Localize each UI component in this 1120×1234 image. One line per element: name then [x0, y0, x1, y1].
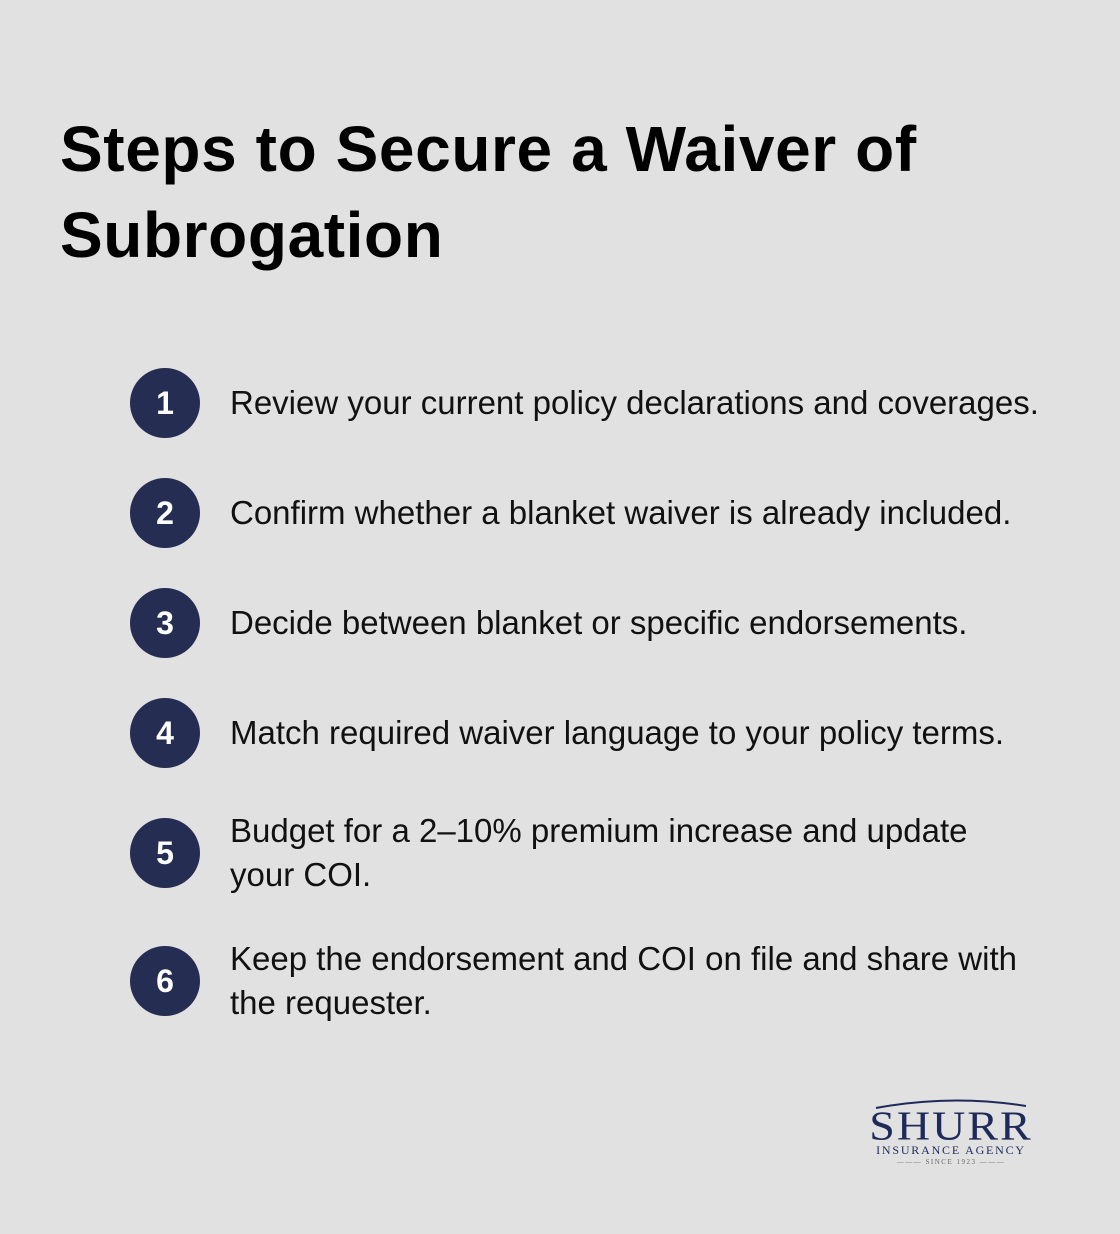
step 6: [130, 940, 1017, 1021]
logo: SHURR: [869, 1103, 1033, 1148]
step 1: 1: [156, 385, 174, 421]
step 1: Review your current policy declarations and coverages.: [230, 384, 1039, 421]
step 1: [130, 368, 1039, 438]
title: Steps to Secure a Waiver of: [60, 113, 917, 185]
step 6: 6: [156, 963, 174, 999]
step 2: Confirm whether a blanket waiver is already included.: [230, 494, 1011, 531]
step 6: the requester.: [230, 984, 432, 1021]
step 2: 2: [156, 495, 174, 531]
step 3: [130, 588, 967, 658]
step 5: 5: [156, 835, 174, 871]
step 3: 3: [156, 605, 174, 641]
step 2: [130, 478, 1011, 548]
step 5: your COI.: [230, 856, 371, 893]
step 4: [130, 698, 1004, 768]
logo: INSURANCE AGENCY: [876, 1143, 1026, 1157]
step 3: Decide between blanket or specific endorsements.: [230, 604, 967, 641]
step 5: Budget for a 2–10% premium increase and update: [230, 812, 967, 849]
title: Subrogation: [60, 199, 443, 271]
title: [60, 113, 917, 271]
step 4: Match required waiver language to your policy terms.: [230, 714, 1004, 751]
step 6: Keep the endorsement and COI on file and share with: [230, 940, 1017, 977]
logo: [869, 1100, 1033, 1166]
logo: ——— SINCE 1923 ———: [897, 1158, 1005, 1166]
step 5: [130, 812, 967, 893]
step 4: 4: [156, 715, 174, 751]
